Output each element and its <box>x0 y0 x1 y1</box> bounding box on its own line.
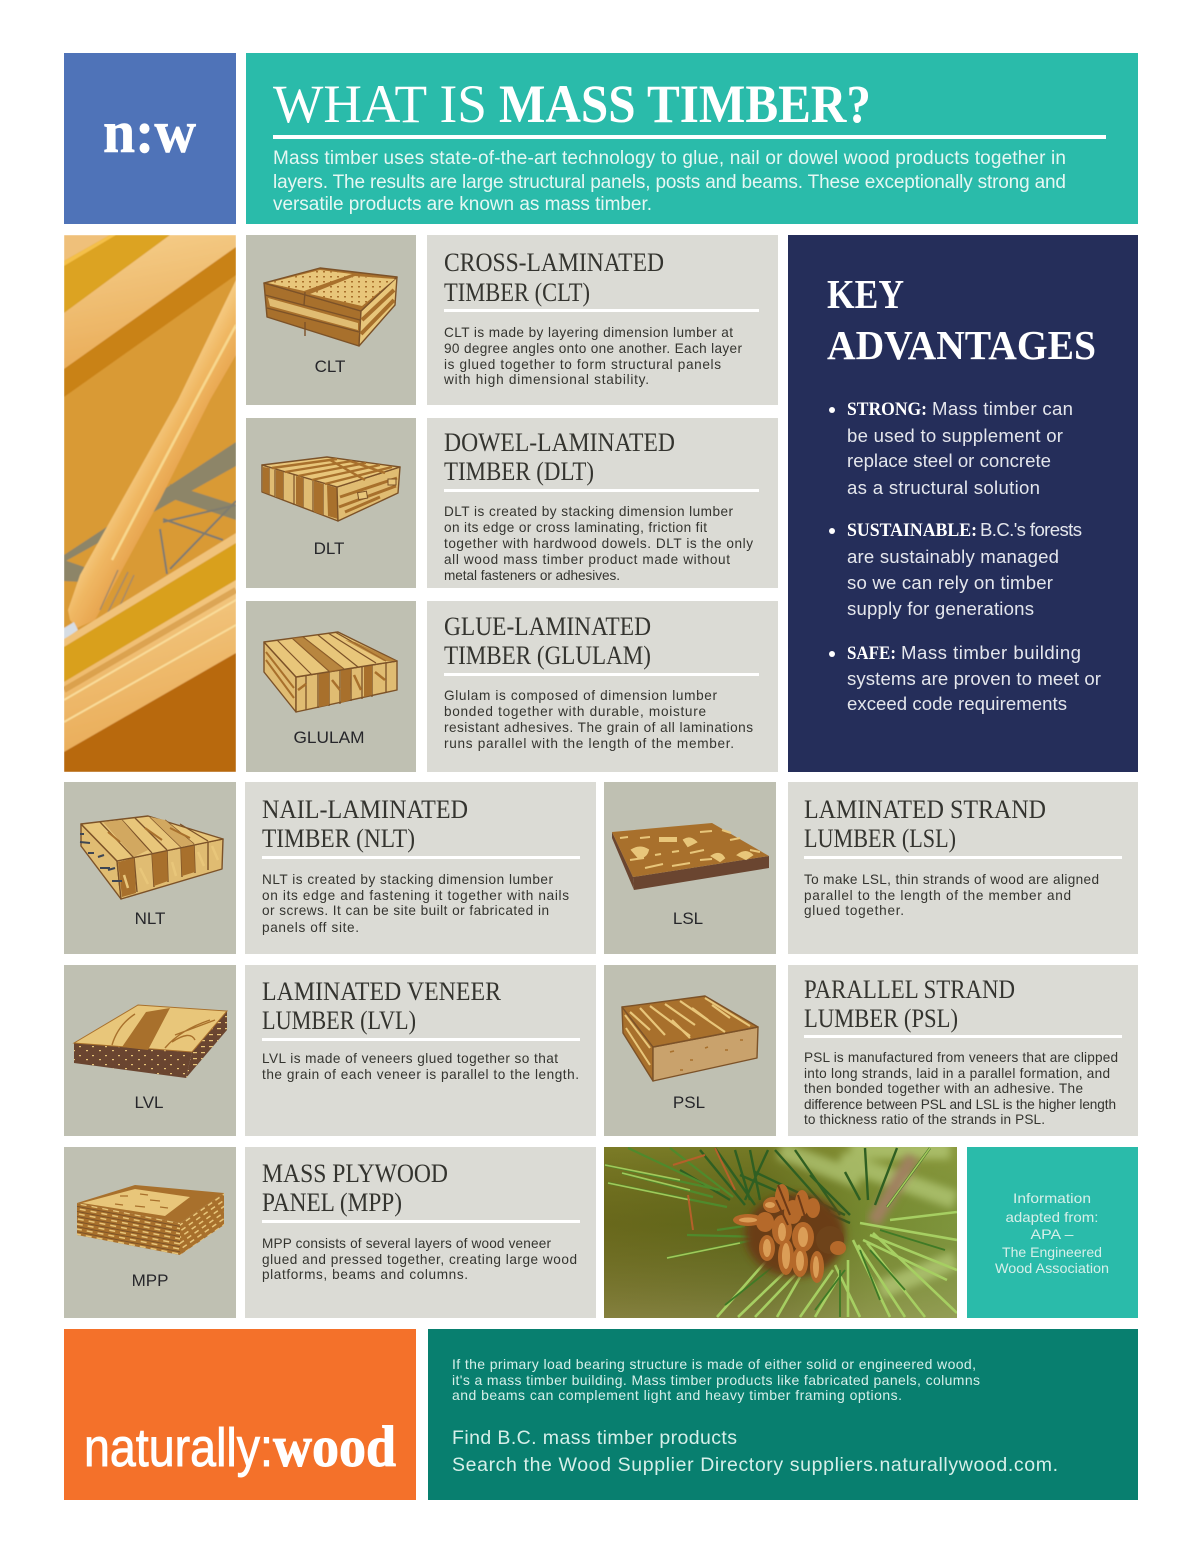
body: Glulam is composed of dimension lumber <box>444 688 717 703</box>
bullet: strong <box>829 398 1073 498</box>
bullet: strong: Mass timber can <box>932 398 1073 419</box>
body: metal fasteners or adhesives. <box>444 568 620 583</box>
intro text: layers. The results are large structural panels, posts and beams. These exceptionally strong and <box>273 172 1066 193</box>
icon: DLT block <box>262 457 400 521</box>
heading: CROSS-LAMINATED <box>444 248 664 277</box>
heading: PARALLEL STRAND <box>804 975 1015 1004</box>
logo panel: n:w <box>64 53 236 224</box>
icon: GLULAM block <box>264 632 397 712</box>
photo: pine branch <box>604 1147 957 1318</box>
footer text: If the primary load bearing structure is made of either solid or engineered wood, <box>452 1356 976 1372</box>
supplier link: Find B.C. mass timber products <box>452 1427 737 1449</box>
body: parallel to the length of the member and <box>804 888 1071 903</box>
body: on its edge or cross laminating, friction fit <box>444 520 707 535</box>
icon: CLT block <box>264 268 397 346</box>
body: difference between PSL and LSL is the higher length <box>804 1097 1116 1112</box>
intro text: Mass timber uses state-of-the-art technology to glue, nail or dowel wood products together in <box>273 148 1066 169</box>
heading: TIMBER (DLT) <box>444 457 594 486</box>
body: platforms, beams and columns. <box>262 1267 468 1282</box>
panel: MPP icon <box>64 1147 236 1318</box>
body <box>443 325 742 387</box>
body: bonded together with durable, moisture <box>444 704 706 719</box>
panel: LVL text <box>245 965 596 1136</box>
icon: MPP block <box>77 1185 224 1255</box>
panel: PSL text <box>788 965 1138 1136</box>
heading: LAMINATED VENEER <box>262 977 502 1006</box>
footer text: and beams can complement light and heavy timber framing options. <box>452 1387 902 1403</box>
panel: DLT icon <box>246 418 416 588</box>
panel: CLT icon <box>246 235 416 405</box>
source text: The Engineered <box>1002 1245 1102 1260</box>
heading <box>262 795 468 853</box>
body: LVL is made of veneers glued together so that <box>262 1051 558 1066</box>
source text: adapted from: <box>1006 1210 1098 1225</box>
panel: NLT icon <box>64 782 236 954</box>
panel: LVL icon <box>64 965 236 1136</box>
body: or screws. It can be site built or fabricated in <box>262 903 549 918</box>
panel: key advantages <box>788 235 1138 772</box>
heading <box>444 428 675 486</box>
panel: LSL icon <box>604 782 776 954</box>
panel: GLULAM text <box>427 601 778 772</box>
label: LSL <box>673 909 703 928</box>
panel: NLT text <box>245 782 596 954</box>
icon: LSL block <box>612 823 769 890</box>
heading <box>827 271 1096 368</box>
panel: footer call to action <box>428 1329 1138 1500</box>
body <box>262 1236 577 1282</box>
body: on its edge and fastening it together with nails <box>262 888 569 903</box>
body: the grain of each veneer is parallel to the length. <box>262 1067 579 1082</box>
heading <box>444 248 664 307</box>
header panel <box>246 53 1138 224</box>
label: DLT <box>314 539 344 558</box>
heading: TIMBER (CLT) <box>444 278 590 307</box>
logo mark: n:w <box>103 99 197 165</box>
body <box>804 1050 1118 1127</box>
bullet: sustainable: are sustainably managed <box>847 546 1059 567</box>
body: NLT is created by stacking dimension lumber <box>262 872 553 887</box>
body: glued and pressed together, creating large wood <box>262 1252 577 1267</box>
title: MASS TIMBER? <box>499 74 871 134</box>
body <box>262 1051 579 1082</box>
body: PSL is manufactured from veneers that are clipped <box>804 1050 1118 1065</box>
body: panels off site. <box>262 920 359 935</box>
bullet: safe: exceed code requirements <box>847 693 1067 714</box>
body: with high dimensional stability. <box>443 372 649 387</box>
wordmark: naturally: <box>84 1418 273 1478</box>
photo: timber beams <box>64 235 236 772</box>
intro text <box>273 148 1066 215</box>
title: WHAT IS <box>273 74 487 134</box>
bullet: strong: be used to supplement or <box>847 425 1063 446</box>
body: all wood mass timber product made without <box>444 552 730 567</box>
body: 90 degree angles onto one another. Each layer <box>444 341 742 356</box>
body: into long strands, laid in a parallel formation, and <box>804 1066 1110 1081</box>
source text: Wood Association <box>995 1261 1109 1276</box>
body: runs parallel with the length of the member. <box>444 736 734 751</box>
source text: APA – <box>1030 1227 1074 1242</box>
body <box>262 872 569 935</box>
heading: ADVANTAGES <box>827 322 1096 368</box>
heading: GLUE-LAMINATED <box>444 612 651 641</box>
panel: CLT text <box>427 235 778 405</box>
body: resistant adhesives. The grain of all laminations <box>444 720 753 735</box>
bullet: sustainable: supply for generations <box>847 598 1034 619</box>
footer text <box>452 1356 980 1403</box>
bullet: strong: replace steel or concrete <box>847 450 1051 471</box>
bullet: sustainable <box>829 519 1082 619</box>
heading <box>804 795 1046 853</box>
body: To make LSL, thin strands of wood are aligned <box>804 872 1099 887</box>
body <box>804 872 1099 918</box>
heading <box>262 1159 448 1217</box>
heading: NAIL-LAMINATED <box>262 795 468 824</box>
panel: PSL icon <box>604 965 776 1136</box>
heading <box>804 975 1015 1033</box>
heading: KEY <box>827 271 904 317</box>
heading <box>444 612 651 670</box>
panel: LSL text <box>788 782 1138 954</box>
heading <box>262 977 502 1035</box>
panel: DLT text <box>427 418 778 588</box>
heading: TIMBER (GLULAM) <box>444 641 651 670</box>
label: LVL <box>134 1093 164 1112</box>
bullet: safe: Mass timber building <box>901 642 1081 663</box>
heading: LUMBER (LVL) <box>262 1006 416 1035</box>
source text: Information <box>1013 1191 1091 1206</box>
label: CLT <box>315 357 345 376</box>
bullet: safe <box>829 642 1101 714</box>
source text <box>995 1191 1109 1276</box>
bullet: safe: SAFE: <box>847 643 896 664</box>
icon: PSL block <box>622 996 758 1081</box>
heading: LUMBER (PSL) <box>804 1004 958 1033</box>
bullet: safe: systems are proven to meet or <box>847 668 1101 689</box>
bullet: sustainable: B.C.'s forests <box>980 519 1082 540</box>
body: is glued together to form structural panels <box>444 357 721 372</box>
panel: naturally:wood logo <box>64 1329 416 1500</box>
heading: TIMBER (NLT) <box>262 824 415 853</box>
heading: MASS PLYWOOD <box>262 1159 448 1188</box>
footer text: it's a mass timber building. Mass timber products like fabricated panels, columns <box>452 1372 980 1388</box>
label: MPP <box>132 1271 168 1290</box>
body: CLT is made by layering dimension lumber at <box>444 325 733 340</box>
body <box>444 504 753 583</box>
bullet: strong: as a structural solution <box>847 477 1040 498</box>
icon: NLT block <box>80 816 223 899</box>
body: together with hardwood dowels. DLT is the only <box>444 536 753 551</box>
bullet: sustainable: so we can rely on timber <box>847 572 1053 593</box>
label: NLT <box>135 909 165 928</box>
panel: MPP text <box>245 1147 596 1318</box>
body: MPP consists of several layers of wood veneer <box>262 1236 551 1251</box>
label: GLULAM <box>294 728 364 747</box>
heading: LUMBER (LSL) <box>804 824 956 853</box>
panel: source note <box>967 1147 1138 1318</box>
body: glued together. <box>804 903 904 918</box>
body: then bonded together with an adhesive. The <box>804 1081 1083 1096</box>
bullet: sustainable: SUSTAINABLE: <box>847 520 977 541</box>
body: DLT is created by stacking dimension lumber <box>444 504 733 519</box>
heading: PANEL (MPP) <box>262 1188 402 1217</box>
heading: DOWEL-LAMINATED <box>444 428 675 457</box>
heading: LAMINATED STRAND <box>804 795 1046 824</box>
wordmark: wood <box>273 1414 396 1479</box>
body: to thickness ratio of the strands in PSL. <box>804 1112 1045 1127</box>
bullet: strong: STRONG: <box>847 399 927 420</box>
icon: LVL block <box>74 1005 227 1078</box>
supplier link <box>452 1427 1058 1476</box>
supplier link: Search the Wood Supplier Directory suppliers.naturallywood.com. <box>452 1454 1058 1476</box>
label: PSL <box>673 1093 705 1112</box>
body <box>444 688 753 751</box>
intro text: versatile products are known as mass timber. <box>273 194 652 215</box>
panel: GLULAM icon <box>246 601 416 772</box>
